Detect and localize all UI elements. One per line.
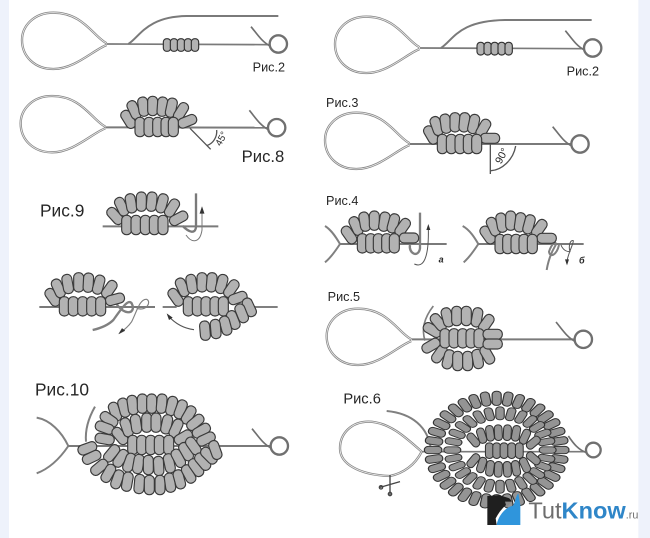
right-angle guide 90°: [490, 144, 516, 174]
middle bead ring: [444, 407, 556, 493]
beads: [43, 273, 126, 316]
label: Рис.3: [326, 96, 358, 110]
threads: [463, 226, 584, 270]
watermark: TutKnow.ru: [487, 493, 638, 525]
right-angle guide 90°: 90°: [493, 146, 511, 166]
panel: Рис.10: [35, 379, 288, 495]
curved arrow: [167, 313, 194, 330]
panel: Рис.4 а: [325, 194, 447, 265]
label: Рис.8: [242, 147, 284, 166]
inner beads: [465, 425, 542, 477]
threads: [37, 407, 270, 473]
panel: Рис.9 lower right: [163, 272, 278, 341]
beads: [166, 272, 258, 341]
panel: Рис.2 left: [22, 13, 287, 74]
panel: Рис.3: [325, 96, 589, 174]
panel: Рис.4 б: [463, 211, 585, 270]
thread loop and arrows: [93, 299, 149, 334]
beads: [119, 96, 198, 137]
label: Рис.4: [326, 194, 358, 208]
panel: Рис.2 right: [335, 17, 601, 79]
five beads: [163, 39, 199, 51]
beads: [422, 112, 500, 154]
panel: Рис.8: [21, 96, 285, 166]
label: Рис.10: [35, 379, 89, 399]
panel: Рис.6: [340, 391, 601, 509]
icon: scissors: [379, 475, 400, 496]
wire and ring: [422, 436, 601, 457]
label: Рис.2: [253, 60, 285, 74]
angle guide 45°: 45°: [214, 130, 230, 148]
label: Рис.2: [567, 65, 599, 79]
icon: logo: [487, 493, 520, 525]
beads: [478, 211, 556, 254]
beads: [339, 211, 419, 253]
threads: [325, 213, 447, 265]
panel: Рис.5: [327, 290, 592, 371]
wordmark: TutKnow.ru: [528, 497, 638, 523]
thread and arrow: [183, 193, 204, 241]
label: Рис.6: [343, 392, 381, 408]
label: Рис.5: [328, 290, 360, 304]
beads: [77, 394, 223, 495]
panel: Рис.9 top: [40, 192, 218, 241]
five beads: [477, 42, 512, 55]
threads: [412, 306, 575, 341]
letter б: б: [579, 255, 585, 265]
outer bead ring: [424, 391, 569, 509]
angle guide 45°: [190, 128, 230, 149]
beads: [105, 192, 190, 235]
label: Рис.9: [40, 200, 84, 220]
threads: [340, 411, 431, 476]
panel: Рис.9 lower left: [39, 273, 155, 334]
letter а: а: [439, 255, 444, 265]
beads: [420, 306, 502, 371]
